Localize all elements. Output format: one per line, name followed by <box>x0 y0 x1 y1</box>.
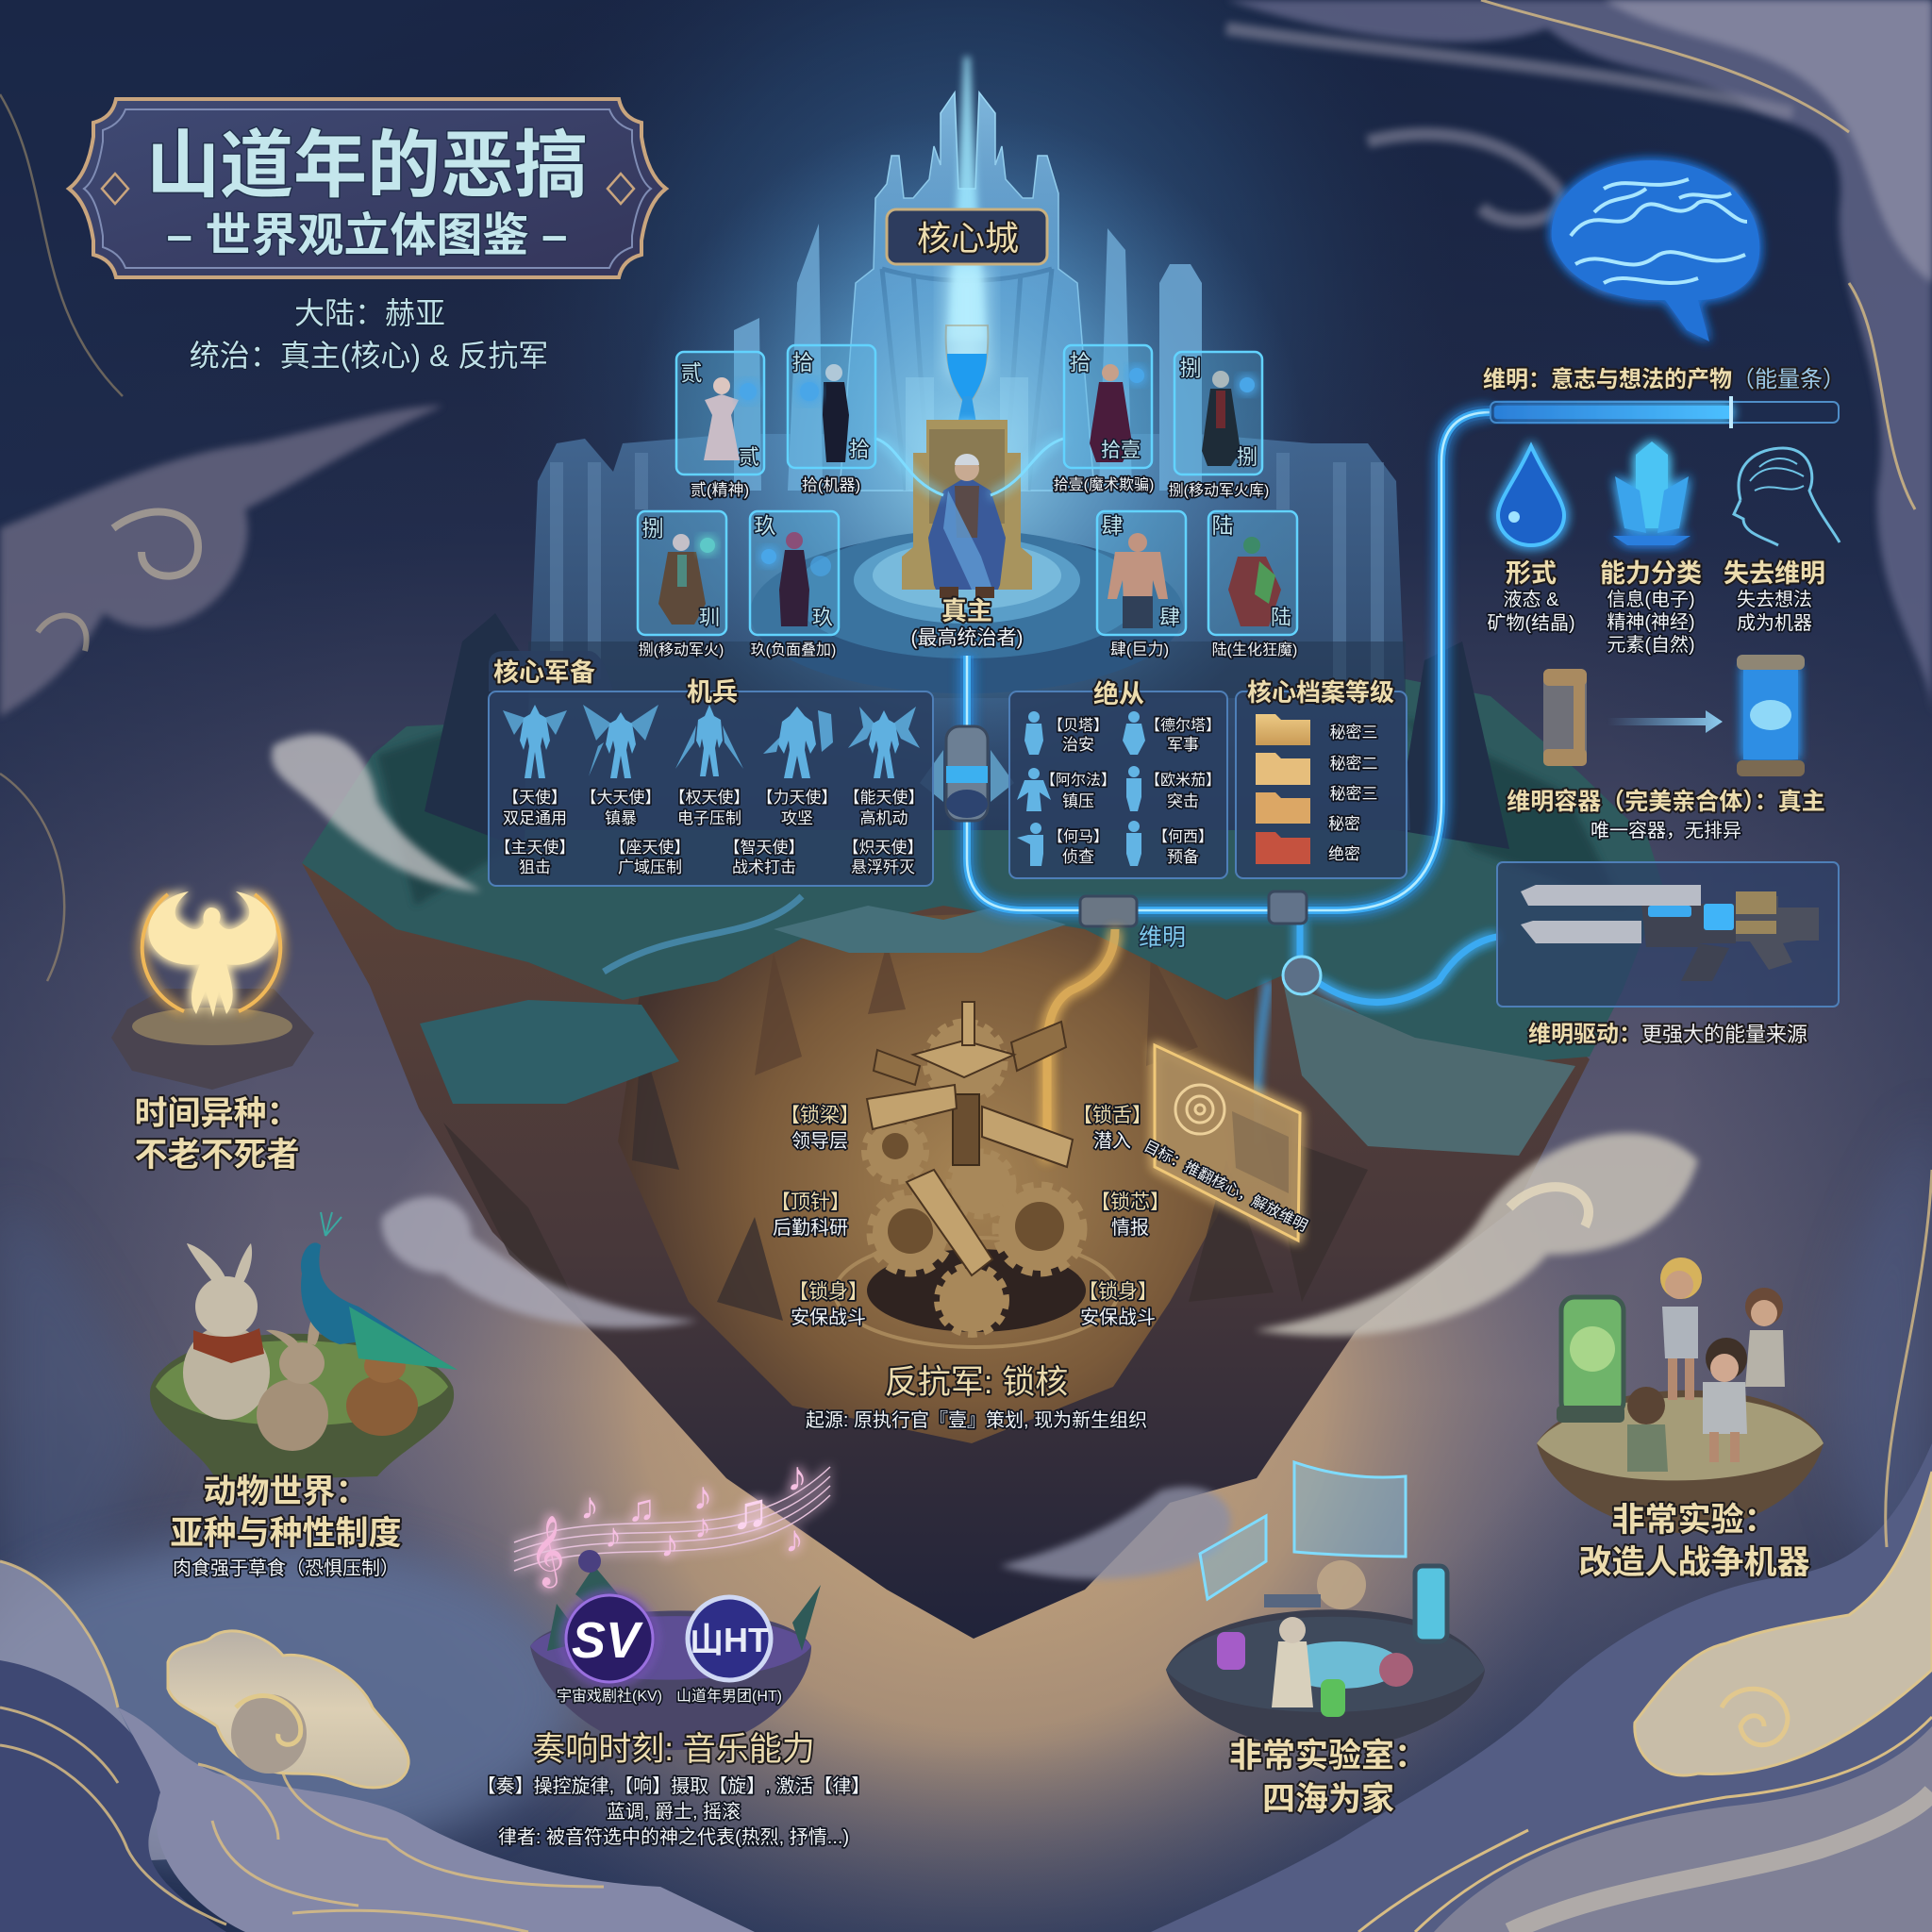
side island: extraordinary lab: 非常实验室： <box>1229 1738 1427 1774</box>
panel: absolute followers: 【何西】 <box>1153 828 1213 845</box>
continent and rule info <box>190 296 548 373</box>
holographic target panel: 目标：推翻核心，解放维明 <box>1141 1138 1310 1235</box>
card: eight mobile: 捌 <box>641 516 664 541</box>
side island: music moment <box>477 1454 870 1848</box>
panel: absolute followers: 绝从 <box>1093 680 1144 708</box>
side island: extraordinary lab: 四海为家 <box>1262 1781 1394 1818</box>
panel: vitality info <box>1483 366 1845 1047</box>
vitality label on pipe: 维明 <box>1139 924 1186 951</box>
card: eleven magic: 拾壹 <box>1101 440 1141 461</box>
dark outer crags <box>425 613 1509 849</box>
card: eleven magic: 拾 <box>1070 350 1091 375</box>
clouds: top right and right edge <box>1226 0 1932 717</box>
panel: mech soldiers: 镇暴 <box>605 809 637 827</box>
rebel role labels: 后勤科研 <box>773 1217 848 1239</box>
icon: water drop <box>1498 446 1564 545</box>
block: ability types: 元素(自然) <box>1607 634 1695 656</box>
card: eight arsenal: 捌 <box>1237 445 1257 469</box>
follower silhouettes <box>1017 711 1145 866</box>
caption: perfect vessel <box>1507 788 1825 841</box>
card: two: 贰 <box>739 445 759 469</box>
continent and rule info: 大陆：赫亚 <box>294 296 445 330</box>
panel: mech soldiers: 机兵 <box>687 678 738 707</box>
panel: mech soldiers: 【能天使】 <box>843 788 924 807</box>
side island: music moment: 蓝调, 爵士, 摇滚 <box>607 1801 741 1823</box>
side island: animal world <box>150 1212 458 1579</box>
card: four strength: 肆 <box>1159 606 1180 629</box>
panel: mech soldiers: 悬浮歼灭 <box>851 858 915 876</box>
music staff and notes: ♫ <box>731 1483 769 1540</box>
icon: phoenix in ring <box>142 891 280 1017</box>
panel: absolute followers: 镇压 <box>1062 792 1094 810</box>
card: eight arsenal: 捌 <box>1179 356 1202 380</box>
side island: time anomaly phoenix: 不老不死者 <box>134 1137 300 1174</box>
rebel role labels <box>771 1105 1170 1328</box>
block: form: 矿物(结晶) <box>1487 612 1575 634</box>
back arms <box>874 1022 1066 1085</box>
panel: core archive levels: 秘密 <box>1328 815 1360 833</box>
hologram screens <box>1200 1462 1406 1599</box>
music staff and notes: ♪ <box>692 1474 713 1518</box>
card: ten machine: 拾 <box>792 350 813 375</box>
block: losing vitality: 失去维明 <box>1724 559 1825 588</box>
gears <box>867 1024 1081 1332</box>
logo: KV badge: SV <box>572 1612 643 1669</box>
music staff and notes: ♪ <box>787 1454 808 1500</box>
panel: absolute followers: 【德尔塔】 <box>1145 717 1221 734</box>
title text: 山道年的恶搞 <box>146 124 588 207</box>
rebel role labels: 潜入 <box>1093 1130 1131 1152</box>
panel: mech soldiers: 【天使】 <box>503 788 567 807</box>
side island: animal world: 动物世界： <box>203 1474 369 1510</box>
block: losing vitality: 失去想法 <box>1737 589 1812 610</box>
pit: brown underground cavern <box>618 910 1264 1443</box>
block: ability types: 能力分类 <box>1600 559 1702 588</box>
panel: core archive levels: 核心档案等级 <box>1247 678 1394 707</box>
music staff and notes: ♪ <box>785 1519 804 1560</box>
vitality heading: 维明：意志与想法的产物（能量条） <box>1483 366 1845 392</box>
card captions: 拾(机器) <box>802 476 860 494</box>
music staff and notes: ♪ <box>580 1486 599 1527</box>
card captions: 贰(精神) <box>691 481 749 499</box>
central light beam <box>948 57 986 340</box>
rebel role labels: 安保战斗 <box>1080 1307 1156 1328</box>
front bars <box>867 1002 1073 1275</box>
caption: vitality drive: 维明驱动：更强大的能量来源 <box>1528 1022 1807 1047</box>
panel: mech soldiers: 战术打击 <box>732 858 796 876</box>
rebel role labels: 【锁梁】 <box>780 1105 859 1126</box>
card: eight arsenal <box>1174 352 1262 475</box>
connector: junctions <box>1080 891 1321 994</box>
rebel role labels: 领导层 <box>791 1130 848 1152</box>
bottom left cloud swirl <box>0 1538 755 1932</box>
icon: empty container <box>1543 669 1587 766</box>
panel: absolute followers <box>1009 680 1227 878</box>
core armaments tab <box>489 651 613 691</box>
predator beast <box>346 1349 418 1436</box>
panel: mech soldiers: 狙击 <box>519 858 551 876</box>
character cards <box>638 345 1297 658</box>
icon: crystal <box>1613 441 1690 545</box>
energy links from throne to cards <box>876 439 1063 495</box>
rabbit with scarf <box>183 1243 270 1420</box>
rebels heading: 起源: 原执行官『壹』策划, 现为新生组织 <box>806 1409 1147 1431</box>
panel: mech soldiers: 广域压制 <box>618 858 682 876</box>
panel: absolute followers: 【阿尔法】 <box>1041 772 1116 789</box>
rebel lock core mechanism <box>835 1002 1118 1347</box>
icon: brain container <box>1737 655 1805 776</box>
true lord label: 真主 <box>941 597 992 625</box>
side island: music moment: 宇宙戏剧社(KV) <box>557 1688 662 1705</box>
block: losing vitality <box>1724 559 1825 634</box>
panel: mech soldiers: 【权天使】 <box>670 788 749 807</box>
panel: absolute followers: 【何马】 <box>1048 828 1108 845</box>
panel: mech soldiers: 攻坚 <box>781 809 813 827</box>
panel: absolute followers: 突击 <box>1167 792 1199 810</box>
music staff and notes: ♪ <box>605 1516 622 1555</box>
side island: animal world: 亚种与种性制度 <box>170 1515 402 1552</box>
rebel role labels: 【锁身】 <box>789 1281 868 1303</box>
card: eleven magic <box>1064 345 1152 468</box>
card: ten machine: 拾 <box>849 438 870 461</box>
panel: mech soldiers: 双足通用 <box>503 809 567 827</box>
card: nine: 玖 <box>755 513 775 538</box>
card: eight mobile <box>638 511 726 635</box>
core armaments tab: 核心军备 <box>493 658 595 687</box>
connector: pipe valve <box>920 726 1014 821</box>
block: ability types <box>1600 559 1702 656</box>
floating rock <box>111 989 314 1090</box>
hourglass with blue liquid <box>946 325 988 454</box>
true lord on throne <box>902 420 1032 598</box>
side island: extraordinary lab <box>1166 1462 1485 1818</box>
block: losing vitality: 成为机器 <box>1737 612 1812 634</box>
caption: perfect vessel: 维明容器（完美亲合体）：真主 <box>1507 788 1825 815</box>
side island: time anomaly phoenix: 时间异种： <box>134 1095 300 1132</box>
card: nine: 玖 <box>812 606 833 629</box>
true lord label <box>911 597 1023 649</box>
arrow <box>1607 710 1723 733</box>
side island: music moment: 律者: 被音符选中的神之代表(热烈, 抒情...) <box>498 1826 849 1848</box>
side island: music moment: 奏响时刻: 音乐能力 <box>532 1731 815 1768</box>
panel: core archive levels <box>1236 678 1407 878</box>
card: four strength <box>1097 511 1186 635</box>
card: four strength: 肆 <box>1102 513 1123 538</box>
block: ability types: 信息(电子) <box>1607 589 1695 610</box>
panel: core archive levels: 绝密 <box>1328 845 1360 863</box>
music staff and notes: 𝄞 <box>529 1516 565 1589</box>
panel: mech soldiers: 【座天使】 <box>609 838 691 857</box>
mech icons row <box>503 705 920 778</box>
flasks and scientist <box>1217 1560 1413 1717</box>
side island: music moment: 山道年男团(HT) <box>676 1688 782 1705</box>
card: six biochemical: 陆 <box>1271 606 1291 629</box>
rebel role labels: 【锁舌】 <box>1073 1105 1152 1126</box>
card captions: 玖(负面叠加) <box>751 641 836 658</box>
island wisp clouds <box>272 734 1698 1579</box>
rebel role labels: 【锁芯】 <box>1091 1191 1170 1213</box>
side island: extraordinary experiments <box>1537 1257 1824 1581</box>
panel: mech soldiers: 【主天使】 <box>494 838 575 857</box>
block: form: 形式 <box>1506 559 1557 588</box>
block: form: 液态 & <box>1504 589 1559 610</box>
main keep <box>840 92 1094 491</box>
caption: perfect vessel: 唯一容器，无排异 <box>1591 820 1741 841</box>
holographic target panel <box>1141 1045 1310 1241</box>
panel: absolute followers: 【贝塔】 <box>1048 717 1108 734</box>
music staff and notes: ♪ <box>660 1524 679 1565</box>
card: nine <box>750 511 839 635</box>
panel: mech soldiers: 【大天使】 <box>581 788 660 807</box>
card: two <box>676 352 764 475</box>
rebel role labels: 【锁身】 <box>1078 1281 1158 1303</box>
side island: extraordinary experiments: 改造人战争机器 <box>1578 1544 1810 1581</box>
energy bar <box>1491 396 1839 428</box>
rebel role labels: 【顶针】 <box>771 1191 850 1213</box>
card: ten machine <box>788 345 875 468</box>
lab tube <box>1415 1566 1447 1641</box>
panel: absolute followers: 军事 <box>1167 736 1199 754</box>
card: two: 贰 <box>681 360 702 385</box>
vitality pipe network <box>920 412 1497 1160</box>
block: ability types: 精神(神经) <box>1607 611 1695 633</box>
green specimen tank <box>1557 1297 1624 1423</box>
card captions: 捌(移动军火) <box>639 641 724 658</box>
panel: mech soldiers: 【力天使】 <box>757 788 838 807</box>
card captions: 陆(生化狂魔) <box>1212 641 1297 658</box>
logo: KV badge <box>566 1595 653 1682</box>
island grassy surface <box>302 679 1663 1156</box>
icon: energy gun <box>1521 885 1819 981</box>
panel: absolute followers: 【欧米茄】 <box>1145 772 1221 789</box>
gold pipe to rebels <box>1047 929 1115 1160</box>
child figures <box>1627 1257 1785 1472</box>
true lord label: (最高统治者) <box>911 627 1023 649</box>
side island: time anomaly phoenix <box>111 891 314 1174</box>
continent and rule info: 统治：真主(核心) & 反抗军 <box>190 339 548 373</box>
subtitle text: – 世界观立体图鉴 – <box>167 210 567 261</box>
card captions <box>639 476 1297 658</box>
side island: animal world: 肉食强于草食（恐惧压制） <box>173 1557 399 1579</box>
card captions: 拾壹(魔术欺骗) <box>1054 476 1154 493</box>
card: six biochemical <box>1208 511 1297 635</box>
rabbit small <box>257 1313 328 1451</box>
rebel role labels: 安保战斗 <box>791 1307 866 1328</box>
icon: head with brain outline <box>1734 448 1840 545</box>
card captions: 肆(巨力) <box>1110 641 1169 658</box>
panel: core archive levels: 秘密三 <box>1330 785 1377 803</box>
peacock <box>301 1212 458 1370</box>
floating purple rock <box>530 1610 811 1750</box>
side island: extraordinary experiments: 非常实验： <box>1611 1502 1777 1539</box>
rebels heading: 反抗军: 锁核 <box>885 1364 1068 1401</box>
panel: mech soldiers: 电子压制 <box>677 809 741 827</box>
panel: absolute followers: 治安 <box>1062 736 1094 754</box>
folder icons <box>1256 714 1310 864</box>
panel: mech soldiers: 【智天使】 <box>724 838 804 857</box>
panel: mech soldiers: 高机动 <box>860 809 908 827</box>
bottom right cloud swirl <box>1151 1170 1932 1932</box>
block: form <box>1487 559 1575 634</box>
logo: HT badge: 山HT <box>690 1621 769 1659</box>
panel: mech soldiers: 【炽天使】 <box>843 838 923 857</box>
music staff and notes: ♫ <box>627 1488 656 1529</box>
music staff and notes <box>514 1454 830 1589</box>
rebel role labels: 情报 <box>1111 1217 1149 1239</box>
card captions: 捌(移动军火库) <box>1169 482 1269 499</box>
core city castle <box>425 57 1509 849</box>
panel: absolute followers: 侦查 <box>1062 848 1094 866</box>
panel: core archive levels: 秘密三 <box>1330 724 1377 741</box>
panel: core archive levels: 秘密二 <box>1330 755 1377 773</box>
label: core city <box>887 209 1047 264</box>
glowing brain <box>1552 160 1759 341</box>
side island: music moment: 【奏】操控旋律,【响】摄取【旋】, 激活【律】 <box>477 1775 870 1797</box>
rebels heading <box>806 1364 1147 1431</box>
panel: mech soldiers <box>489 678 933 886</box>
music staff and notes: ♪ <box>694 1507 711 1545</box>
throne platform <box>750 530 1184 693</box>
floating island rock <box>302 849 1590 1639</box>
label: core city: 核心城 <box>917 219 1019 258</box>
card: eight mobile: 玔 <box>699 606 720 629</box>
panel: absolute followers: 预备 <box>1167 848 1199 866</box>
side towers <box>734 224 1202 491</box>
logo: HT badge <box>688 1597 771 1680</box>
lower walls <box>524 434 1410 830</box>
card: six biochemical: 陆 <box>1211 513 1234 538</box>
panel: vitality weapon <box>1497 862 1839 1007</box>
title banner <box>69 99 666 277</box>
